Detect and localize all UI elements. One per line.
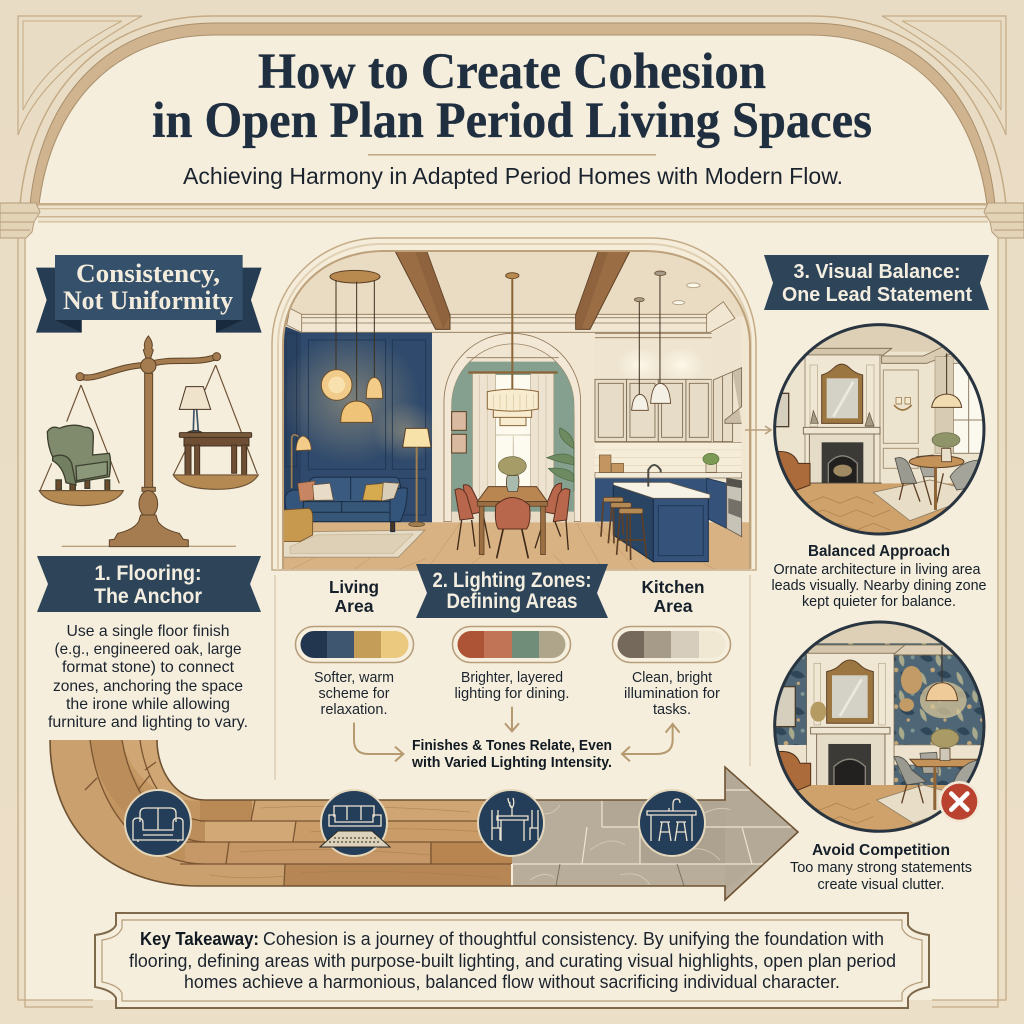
text: balanced approach: kept quieter for balance. [802,594,956,610]
label: kitchen area: Area [654,596,693,616]
arch frame inner edge [283,251,750,569]
dining set [917,455,937,477]
text: balanced approach: Balanced Approach [808,543,950,560]
entablature and column capitals [0,203,1024,1007]
floor [770,785,990,840]
heading: 3. visual balance [764,255,989,310]
mirror [822,364,863,423]
callout: key takeaway: flooring, defining areas with purpose-built lighting, and curating visual highlights, open plan period [129,951,896,971]
swatch: dining palette [452,626,570,662]
text: living note: Softer, warm [314,670,394,686]
counter and base cabinets [595,478,708,522]
beam and column [80,357,217,378]
heading: 1. flooring: The Anchor [94,584,203,608]
dining table [477,487,547,502]
text: kitchen note [624,670,720,718]
heading: 2. lighting zones: 2. Lighting Zones: [432,569,592,592]
text: dining note [454,670,570,702]
pans [39,491,123,506]
text: living note: relaxation. [320,702,388,718]
heading: 2. lighting zones [416,564,608,618]
central doorway arch [444,333,581,522]
title: in Open Plan Period Living Spaces [152,93,872,149]
text: living note [314,670,394,718]
text: avoid competition: Avoid Competition [812,842,950,859]
banner: consistency, not uniformity: Not Uniformity [63,286,233,315]
mirror [827,660,873,723]
island [613,485,653,562]
callout: key takeaway: Cohesion is a journey of thoughtful consistency. By unifying the foundation with [263,929,884,949]
icon: sofa and rug medallion [320,790,390,856]
heading: 2. lighting zones: Defining Areas [446,590,578,613]
mantel [817,733,885,787]
text: living note: scheme for [318,686,390,702]
text: kitchen note: Clean, bright [632,670,712,686]
subtitle: Achieving Harmony in Adapted Period Homes with Modern Flow. [183,163,843,189]
heading: 1. flooring: 1. Flooring: [94,561,202,585]
callout: key takeaway: homes achieve a harmonious, balanced flow without sacrificing individual character. [184,972,840,992]
banner: consistency, not uniformity: Consistency, [76,259,220,288]
right wall kitchen [712,334,713,442]
text: kitchen note: tasks. [653,702,691,718]
heading: 3. visual balance: 3. Visual Balance: [794,260,960,283]
icon: kitchen island medallion [639,790,705,856]
central arch frame [272,238,756,570]
title [152,44,872,149]
crown moulding [287,302,735,332]
label: kitchen area [642,577,704,616]
ottoman with throw [283,508,313,542]
text: flooring body: zones, anchoring the space [53,678,243,695]
vase and flowers [506,476,519,492]
pendant cluster [321,270,383,422]
label: living area: Area [334,596,374,616]
sofa [285,477,407,532]
dining chairs back [455,483,570,522]
plant [547,428,574,492]
callout: key takeaway: Key Takeaway: [140,929,259,949]
floor [796,483,954,532]
dining set [920,752,938,773]
pendant [940,647,943,683]
text: flooring body: furniture and lighting to vary. [48,714,248,731]
architectural arch [18,16,1006,205]
label: living area [329,577,379,616]
text: balanced approach: leads visually. Nearby dining zone [772,578,986,594]
text: balanced approach [772,543,986,610]
text: finishes and tones: Finishes & Tones Relate, Even [412,738,612,754]
side table and lamp [179,387,252,477]
stone section [512,760,802,905]
floor lamp [403,428,431,447]
sconce [896,397,910,404]
text: finishes and tones: with Varied Lighting Intensity. [411,755,612,771]
medallion: avoid competition room [770,620,990,840]
chandelier [506,273,519,279]
armchair [47,425,110,493]
arrow: interior to balance panel [745,426,771,434]
heading: 1. flooring [37,556,261,612]
armchair [770,751,811,790]
flooring arrow [50,740,802,905]
kitchen upper [595,333,712,443]
text: dining note: lighting for dining. [454,686,570,702]
text: avoid competition: create visual clutter. [818,877,944,893]
mantel [809,433,874,483]
title: How to Create Cohesion [258,44,766,100]
text: kitchen note: illumination for [624,686,720,702]
icon: dining medallion [478,790,544,856]
illustration: open plan interior [280,245,753,575]
icon: balance scale with armchair and side table [39,336,258,547]
rug [283,530,425,557]
icon: armchair sofa medallion [125,790,191,856]
text: flooring body: format stone) to connect [62,659,235,676]
icon: red cross badge [939,781,980,822]
swatch: living palette [296,626,414,662]
callout: key takeaway [95,913,929,1008]
rug [872,480,964,521]
text: flooring body: Use a single floor finish [66,623,230,640]
pendant [946,353,948,394]
wall light [292,435,298,488]
beams [395,251,450,329]
heading: 3. visual balance: One Lead Statement [782,283,972,306]
text: flooring body: the irone while allowing [66,696,230,713]
banner: consistency, not uniformity [36,255,262,333]
arrows: tone connectors [354,707,680,761]
backsplash [712,443,742,472]
stools [601,502,647,560]
floor [280,522,753,572]
front chair [495,497,530,558]
armchair [778,451,810,490]
text: dining note: Brighter, layered [461,670,563,686]
text: balanced approach: Ornate architecture in living area [774,562,981,578]
text: finishes and tones [411,738,612,771]
text: flooring body [48,623,248,731]
label: kitchen area: Kitchen [642,577,704,597]
kitchen pendants [639,274,660,394]
text: avoid competition: Too many strong statements [790,860,972,876]
text: flooring body: (e.g., engineered oak, large [54,641,242,658]
label: living area: Living [329,577,379,597]
window [952,362,982,454]
zone dividers [275,575,750,780]
text: avoid competition [790,842,972,893]
navy wall [301,333,432,523]
wood planks [200,800,512,821]
swatch: kitchen palette [612,626,730,662]
boards and plant [599,455,611,472]
medallion: balanced approach room [770,320,990,540]
